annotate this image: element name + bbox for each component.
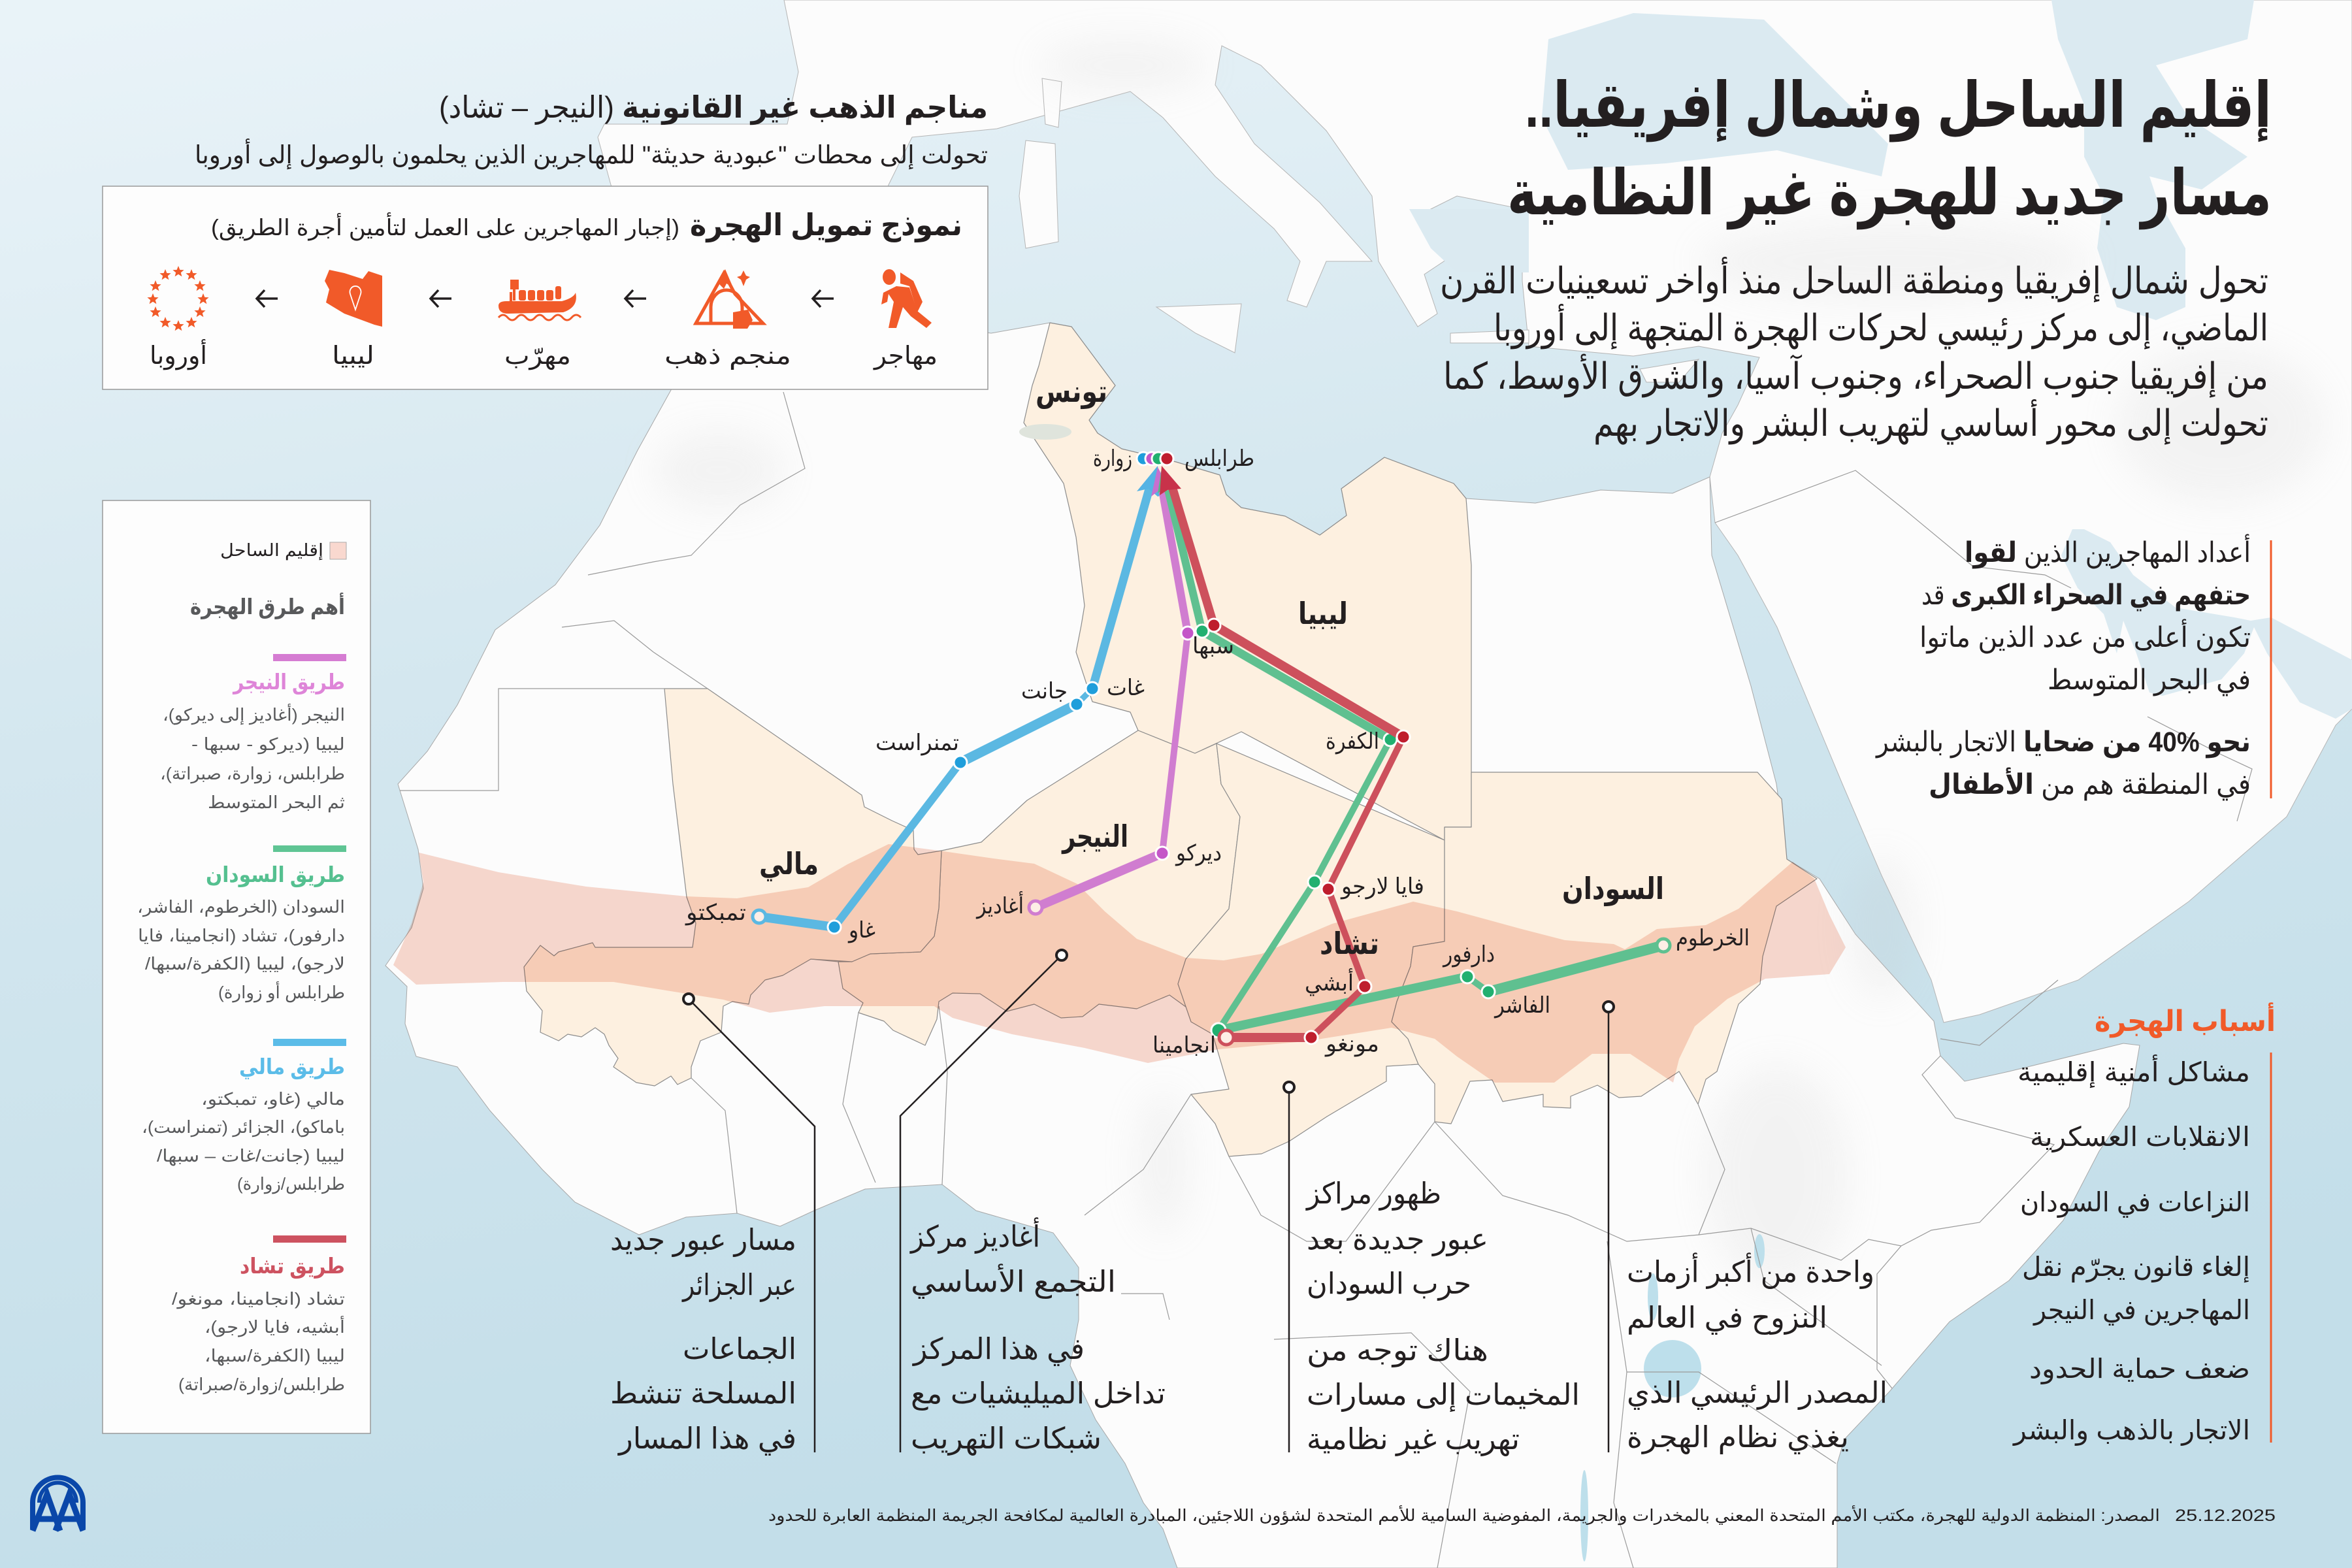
causes of migration: النزاعات في السودان <box>2020 1187 2250 1218</box>
callout: new crossing centres after the Sudan war <box>1305 1177 1580 1456</box>
map labels: countries: ليبيا <box>1298 596 1348 630</box>
route: Sudan <box>1158 468 1670 1037</box>
callout: new transit route via Algeria: المسلحة تنشط <box>610 1377 796 1410</box>
causes of migration: الاتجار بالذهب والبشر <box>2012 1415 2250 1446</box>
callout: displacement crisis: يغذي نظام الهجرة <box>1627 1420 1849 1454</box>
callout: new crossing centres after the Sudan war: المخيمات إلى مسارات <box>1307 1378 1580 1412</box>
gold mines heading <box>195 90 988 170</box>
callout: new crossing centres after the Sudan war: تهريب غير نظامية <box>1307 1422 1520 1456</box>
callout: Agadez hub <box>909 1217 1166 1456</box>
statistics block: حتفهم في الصحراء الكبرى قد <box>1921 580 2251 612</box>
Tunisia salt lakes <box>1019 424 1071 440</box>
gold mines heading: مناجم الذهب غير القانونية (النيجر – تشاد) <box>439 90 988 125</box>
statistics block: نحو %40 من ضحايا الاتجار بالبشر <box>1875 727 2251 759</box>
map labels: cities: جانت <box>1021 679 1068 704</box>
callout: Agadez hub: في هذا المركز <box>912 1332 1085 1366</box>
legend: Mali route: باماكو)، الجزائر (تمنراست)، <box>142 1117 345 1137</box>
icon: smuggler boat <box>498 280 581 320</box>
map labels: cities: الخرطوم <box>1676 926 1750 951</box>
callout: displacement crisis: واحدة من أكبر أزمات <box>1627 1252 1874 1290</box>
map labels: cities: أغاديز <box>975 891 1024 919</box>
destination dots: Tripoli and Zuwara <box>1137 452 1173 465</box>
title <box>1507 71 2272 230</box>
map labels: cities: الفاشر <box>1494 993 1550 1019</box>
legend: Niger route: ليبيا (ديركو - سبها - <box>191 734 345 755</box>
arrows <box>257 290 834 307</box>
legend: Chad route: طريق تشاد <box>240 1254 345 1279</box>
map labels: countries: تونس <box>1036 374 1107 409</box>
map labels: cities: غاو <box>847 918 875 943</box>
causes heading: أسباب الهجرة <box>2095 1002 2276 1038</box>
icon: migrant <box>881 269 932 328</box>
legend: Chad route: ليبيا (الكفرة/سبها، <box>204 1346 345 1366</box>
callout: new crossing centres after the Sudan war: هناك توجه من <box>1307 1333 1488 1367</box>
statistics block <box>1875 534 2272 801</box>
map labels: countries: السودان <box>1562 872 1664 906</box>
callout: displacement crisis <box>1627 1252 1887 1454</box>
terrain shading <box>653 39 2326 1287</box>
legend: Chad route: تشاد (انجامينا، مونغو/ <box>172 1289 345 1309</box>
callout: Agadez hub: التجمع الأساسي <box>911 1263 1116 1299</box>
step labels: منجم ذهب <box>664 342 791 370</box>
legend: Niger route: ثم البحر المتوسط <box>208 792 345 813</box>
intro paragraph: من إفريقيا جنوب الصحراء، وجنوب آسيا، والشرق الأوسط، كما <box>1443 353 2268 399</box>
country: Chad <box>1178 743 1445 1156</box>
route: Niger <box>1029 467 1194 914</box>
map labels: cities: ديركو <box>1175 841 1222 866</box>
legend: Chad route: أبشيه، فايا لارجو)، <box>204 1315 345 1337</box>
callout: new crossing centres after the Sudan war: عبور جديدة بعد <box>1307 1222 1488 1256</box>
causes of migration: الانقلابات العسكرية <box>2030 1122 2250 1152</box>
legend: Mali route: مالي (غاو، تمبكتو، <box>201 1089 345 1109</box>
map labels: countries: النيجر <box>1061 819 1128 854</box>
step labels: ليبيا <box>332 342 374 370</box>
legend: Sahel region: إقليم الساحل <box>220 540 323 561</box>
callout: displacement crisis: المصدر الرئيسي الذي <box>1627 1376 1887 1410</box>
legend: Sudan route: طرابلس أو زوارة) <box>218 981 345 1003</box>
gold mines heading: تحولت إلى محطات "عبودية حديثة" للمهاجرين الذين يحلمون بالوصول إلى أوروبا <box>195 139 988 170</box>
legend: Mali route: ليبيا (جانت/غات – سبها/ <box>157 1146 345 1166</box>
legend: Mali route <box>142 1039 346 1194</box>
callout: new transit route via Algeria: عبر الجزائر <box>681 1268 796 1302</box>
causes of migration: مشاكل أمنية إقليمية <box>2017 1054 2250 1088</box>
Sahel region band <box>393 844 1846 1083</box>
causes of migration: إلغاء قانون يجرّم نقل <box>2022 1252 2250 1282</box>
legend: Sudan route <box>137 845 346 1003</box>
route: Mali <box>753 466 1162 934</box>
countries highlighted <box>524 323 1817 1156</box>
map labels: countries: تشاد <box>1320 926 1379 960</box>
legend: Mali route: طرابلس/زوارة) <box>237 1174 345 1194</box>
other borders <box>400 392 2252 1568</box>
islands <box>1019 78 1699 382</box>
panel heading: (إجبار المهاجرين على العمل لتأمين أجرة الطريق) <box>211 212 679 241</box>
legend: Niger route: طرابلس، زوارة، صبراتة)، <box>160 764 345 784</box>
map labels: cities: مونغو <box>1324 1032 1379 1057</box>
statistics block: في البحر المتوسط <box>2048 664 2251 696</box>
step labels: مهرّب <box>504 342 571 370</box>
intro paragraph: تحول شمال إفريقيا ومنطقة الساحل منذ أواخر تسعينيات القرن <box>1440 257 2268 303</box>
legend: Sudan route: دارفور)، تشاد (انجامينا، فايا <box>138 926 345 946</box>
causes of migration <box>2012 1002 2276 1446</box>
inland seas and gulfs <box>1409 0 2352 719</box>
legend: Niger route: طريق النيجر <box>232 670 345 695</box>
callout: new crossing centres after the Sudan war: ظهور مراكز <box>1305 1177 1441 1211</box>
map labels: cities: تمنراست <box>875 730 959 756</box>
map labels: cities: طرابلس <box>1184 446 1254 472</box>
statistics block: أعداد المهاجرين الذين لقوا <box>1965 534 2251 569</box>
marker: Chad crossing centres <box>1284 1082 1294 1452</box>
country: Niger <box>838 730 1240 1045</box>
panel: legend <box>103 500 370 1433</box>
causes of migration: المهاجرين في النيجر <box>2033 1295 2250 1326</box>
map labels: cities: الكفرة <box>1326 729 1379 755</box>
marker: new route via Algeria <box>683 994 815 1452</box>
map labels: countries <box>759 374 1664 960</box>
callout: new transit route via Algeria: في هذا المسار <box>617 1422 796 1456</box>
legend: Chad route: طرابلس/زوارة/صبراتة) <box>178 1375 345 1395</box>
map labels: cities: فايا لارجو <box>1340 874 1424 900</box>
callout: displacement crisis: النزوح في العالم <box>1627 1301 1827 1335</box>
country: Mali <box>524 689 941 1086</box>
causes of migration: ضعف حماية الحدود <box>2029 1354 2250 1384</box>
map labels: countries: مالي <box>759 847 819 881</box>
legend: Sudan route: طريق السودان <box>206 862 345 888</box>
map labels: cities <box>685 446 1750 1058</box>
land: Europe and Asia <box>598 0 2352 1022</box>
marker: Agadez <box>900 950 1067 1452</box>
callout: new transit route via Algeria <box>610 1223 796 1456</box>
source line: 25.12.2025 <box>2175 1507 2276 1525</box>
map labels: cities: سبها <box>1192 634 1234 659</box>
callout: new transit route via Algeria: الجماعات <box>683 1332 796 1365</box>
legend: Niger route <box>160 654 346 813</box>
legend heading: أهم طرق الهجرة <box>190 593 345 620</box>
callout: new crossing centres after the Sudan war: حرب السودان <box>1307 1267 1471 1301</box>
legend: Chad route <box>172 1235 346 1395</box>
legend: Mali route: طريق مالي <box>239 1054 345 1080</box>
map labels: cities: انجامينا <box>1152 1033 1216 1058</box>
callout: Agadez hub: شبكات التهريب <box>911 1422 1102 1456</box>
map labels: cities: غات <box>1107 676 1145 700</box>
legend: Niger route: النيجر (أغاديز إلى ديركو)، <box>163 703 345 725</box>
land: Africa <box>385 314 2140 1568</box>
legend: Sudan route: لارجو)، ليبيا (الكفرة/سبها/ <box>145 954 345 974</box>
intro paragraph: تحولت إلى محور أساسي لتهريب البشر والاتجار بهم <box>1593 399 2268 446</box>
legend: Sudan route: السودان (الخرطوم، الفاشر، <box>137 897 345 917</box>
route: Chad <box>1160 466 1410 1045</box>
callout: Agadez hub: تداخل الميليشيات مع <box>911 1377 1166 1411</box>
callout: Agadez hub: أغاديز مركز <box>909 1217 1040 1254</box>
step labels: مهاجر <box>873 342 938 370</box>
icon: gold mine <box>696 269 763 329</box>
country: Tunisia and Libya <box>1024 323 1471 840</box>
statistics block: تكون أعلى من عدد الذين ماتوا <box>1919 619 2251 654</box>
map labels: cities: أبشي <box>1305 968 1354 996</box>
map labels: cities: تمبكتو <box>685 900 746 926</box>
panel: migration financing model <box>103 186 988 389</box>
icon: Libya map <box>325 270 382 327</box>
icon: European Union stars <box>147 266 209 331</box>
leader lines and markers <box>683 950 1614 1452</box>
intro paragraph <box>1440 257 2268 446</box>
source line: المصدر: المنظمة الدولية للهجرة، مكتب الأمم المتحدة المعني بالمخدرات والجريمة، المفوضية السامية للأمم المتحدة لشؤون اللاجئين، المبادرة العالمية لمكافحة الجريمة المنظمة العابرة للحدود <box>768 1505 2160 1526</box>
statistics block: في المنطقة هم من الأطفال <box>1929 767 2251 801</box>
logo: news agency mark <box>33 1478 83 1531</box>
country: Sudan <box>1392 772 1817 1124</box>
step labels: أوروبا <box>150 339 207 370</box>
panel heading <box>211 208 962 242</box>
migration routes <box>753 452 1670 1045</box>
marker: Sudan displacement <box>1603 1002 1614 1452</box>
lakes <box>1580 1234 1765 1561</box>
callout: new transit route via Algeria: مسار عبور جديد <box>610 1223 796 1257</box>
map labels: cities: زوارة <box>1093 446 1132 472</box>
panel heading: نموذج تمويل الهجرة <box>690 208 962 242</box>
map labels: cities: دارفور <box>1442 942 1495 968</box>
step labels <box>150 339 938 370</box>
